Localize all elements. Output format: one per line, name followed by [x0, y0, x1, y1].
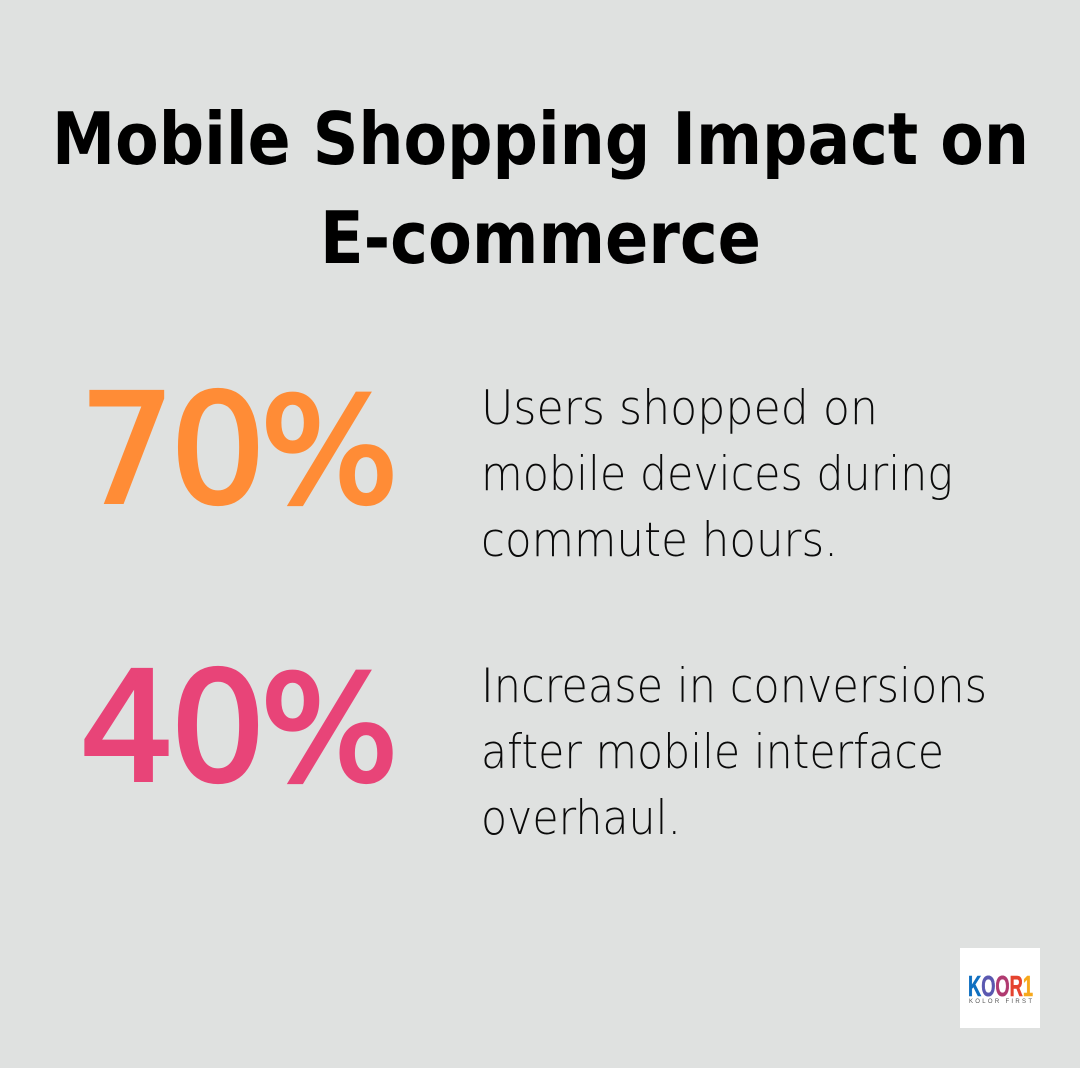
stat: 40%: % [260, 645, 399, 815]
title: E-commerce [320, 196, 761, 280]
logo: KOOR1 Kolor First [960, 948, 1040, 1028]
stat: 40%: 0 [170, 640, 266, 816]
stat: 70%: 0 [170, 362, 266, 538]
stat: 70%: 7 [79, 362, 175, 538]
text: conversion stat description: after mobile interface [481, 725, 944, 780]
text: commute stat description [481, 381, 953, 568]
text: conversion stat description [481, 659, 987, 846]
stat: 70%: % [260, 367, 399, 537]
text: commute stat description: commute hours. [481, 513, 838, 568]
logo: KOOR1 Kolor First: KOOR1 [968, 971, 1033, 1003]
logo: KOOR1 Kolor First: KOLOR FIRST [969, 999, 1032, 1005]
text: conversion stat description: overhaul. [481, 791, 681, 846]
stat: 40%: 4 [79, 640, 175, 816]
text: commute stat description: mobile devices during [481, 447, 953, 502]
text: commute stat description: Users shopped on [481, 381, 878, 436]
title [52, 97, 1029, 280]
text: conversion stat description: Increase in conversions [481, 659, 987, 714]
